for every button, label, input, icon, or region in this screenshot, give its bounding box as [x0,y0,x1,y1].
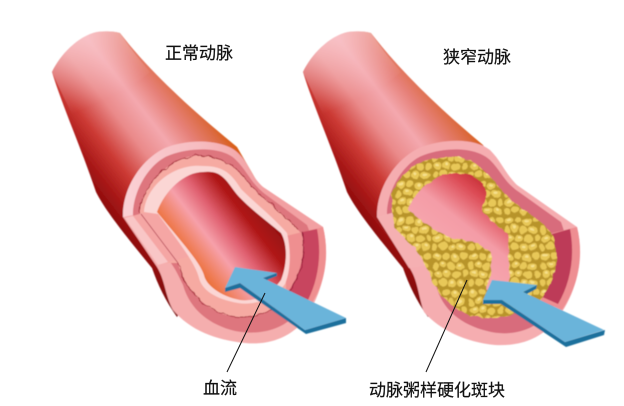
leader line: plaque [426,280,467,372]
wavy inner membrane [140,155,298,317]
cut face: right side [286,227,326,306]
outer wall [377,141,580,345]
outer wall upper light [123,142,323,236]
arrow: blood flow [225,267,346,334]
atherosclerotic plaque [392,156,556,318]
artery tube body [303,31,513,317]
panel: narrowed artery [303,31,605,347]
cut face: pale edge [125,216,168,265]
arrow side [225,273,346,334]
heading: narrowed artery: 狭窄动脉 [443,48,511,67]
outer wall [123,142,326,343]
cut face: membrane line [141,214,178,263]
pale rim around lumen [144,166,290,304]
middle wall layer [133,149,313,333]
right cut outer band [286,227,326,306]
leader line: blood flow [227,293,265,372]
arrow side [483,285,605,347]
label: atherosclerotic plaque: 动脉粥样硬化斑块 [369,381,505,400]
arrow face [225,267,346,330]
cut face: left [377,212,450,268]
heading: normal artery: 正常动脉 [165,44,233,63]
right cut dark band [540,229,572,304]
lumen interior [157,172,286,300]
middle wall layer [387,149,567,333]
right cut membrane [288,232,303,292]
tube end highlight [303,31,401,130]
cut face: right [540,227,580,310]
label: blood flow: 血流 [203,379,237,398]
tube end highlight [52,31,150,130]
artery tube body [52,31,262,317]
inner wall layer [140,155,303,317]
right cut outer band [540,227,580,310]
arrow face [483,280,604,342]
lumen interior [400,160,515,305]
right cut dark band [288,229,319,300]
panel: normal artery [52,31,346,343]
cut face: left wedge [125,213,195,265]
arrow: blood flow [483,280,605,347]
